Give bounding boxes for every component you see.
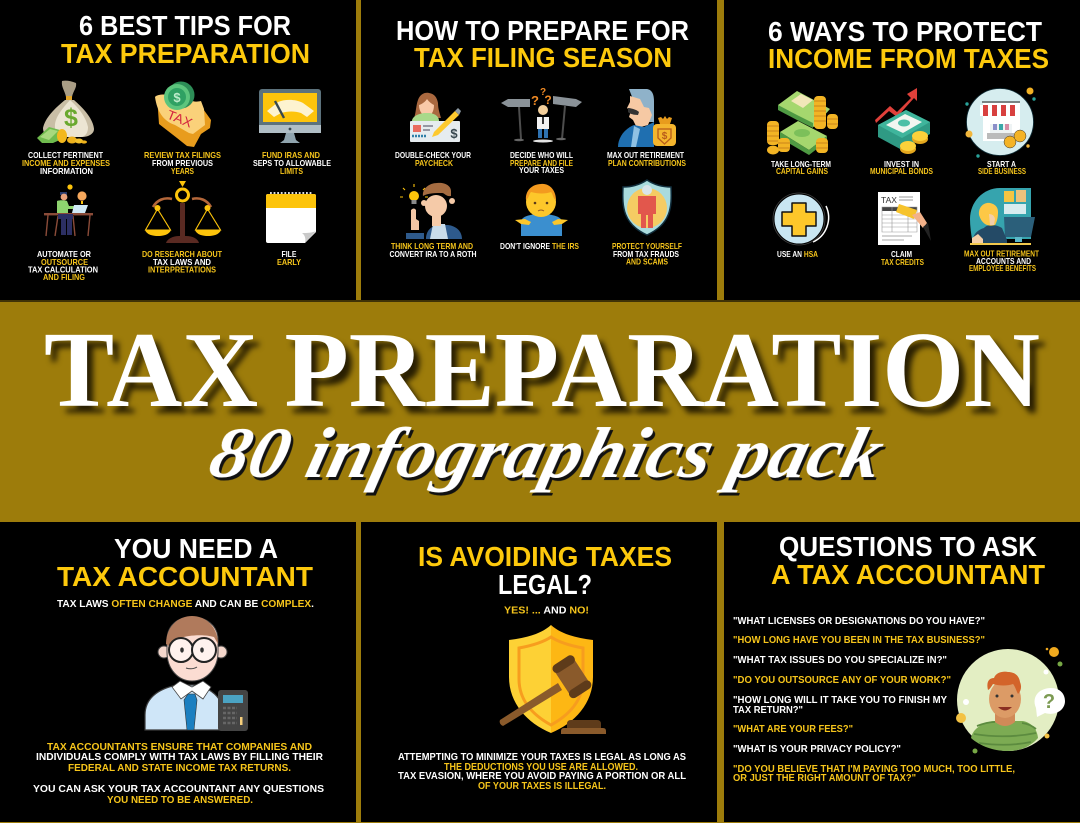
- icon: retirement man with bag: [618, 89, 676, 147]
- heading: [418, 541, 672, 600]
- heading: [61, 10, 310, 69]
- label: claim tax credits: CLAIM: [891, 249, 912, 259]
- body text: YOU NEED TO BE ANSWERED.: [107, 794, 253, 806]
- label: collect information: COLLECT PERTINENT: [28, 150, 104, 160]
- label: claim tax credits: [881, 249, 924, 267]
- label: collect information: INFORMATION: [40, 166, 93, 176]
- icon: boy with question bubble: [956, 647, 1065, 754]
- label: think long term: CONVERT IRA TO A ROTH: [390, 249, 476, 259]
- question list: TAX RETURN?": [733, 704, 803, 716]
- label: think long term: THINK LONG TERM AND: [391, 241, 473, 251]
- icon: protection shield: [623, 180, 671, 235]
- heading: TAX ACCOUNTANT: [57, 561, 313, 592]
- icon: piggy bank: TAX: [165, 107, 195, 131]
- label: protect yourself: PROTECT YOURSELF: [612, 241, 682, 251]
- panel: how to prepare for tax filing season: [361, 0, 717, 300]
- icon: signposts and questions: ?: [531, 93, 539, 108]
- body text: OF YOUR TAXES IS ILLEGAL.: [478, 780, 606, 792]
- question list: "HOW LONG WILL IT TAKE YOU TO FINISH MY: [733, 694, 947, 706]
- label: municipal bonds: MUNICIPAL BONDS: [870, 166, 933, 176]
- main title: TAX PREPARATION: [44, 311, 1040, 430]
- answer line: YES! ... AND NO!: [504, 604, 589, 616]
- intro line: TAX LAWS OFTEN CHANGE AND CAN BE COMPLEX.: [57, 598, 314, 610]
- label: municipal bonds: INVEST IN: [884, 159, 919, 169]
- heading: [57, 533, 313, 592]
- icon: money bag: [37, 81, 94, 144]
- label: review filings: REVIEW TAX FILINGS: [144, 150, 221, 160]
- label: fund iras: FUND IRAS AND: [262, 150, 320, 160]
- question list: "WHAT LICENSES OR DESIGNATIONS DO YOU HAVE?": [733, 615, 985, 627]
- label: side business: START A: [987, 159, 1016, 169]
- label: max out retirement accounts: EMPLOYEE BENEFITS: [969, 263, 1036, 273]
- question list: "WHAT TAX ISSUES DO YOU SPECIALIZE IN?": [733, 654, 947, 666]
- label: do research: INTERPRETATIONS: [148, 264, 216, 274]
- icon: signposts and questions: [501, 87, 582, 142]
- icon: signposts and questions: ?: [540, 87, 546, 98]
- label: max out retirement plan: MAX OUT RETIREMENT: [607, 150, 685, 160]
- question list: [733, 615, 1015, 784]
- panel: is avoiding taxes legal: [361, 522, 717, 822]
- icon: shop in circle: [965, 88, 1036, 158]
- label: decide who will prepare: PREPARE AND FILE: [510, 158, 573, 168]
- label: file early: [277, 249, 301, 267]
- label: review filings: YEARS: [171, 166, 194, 176]
- icon: accountant with calculator: [145, 616, 248, 731]
- icon: woman at monitor: [970, 188, 1035, 245]
- label: collect information: INCOME AND EXPENSES: [22, 158, 110, 168]
- label: don't ignore the irs: DON'T IGNORE THE IRS: [500, 241, 579, 251]
- icon: person at desk: [44, 184, 93, 236]
- label: collect information: [22, 150, 110, 176]
- label: double-check paycheck: [395, 150, 471, 168]
- label: automate or outsource: TAX CALCULATION: [28, 264, 98, 274]
- icon: shield and gavel: [500, 625, 606, 734]
- heading: YOU NEED A: [114, 533, 278, 564]
- label: automate or outsource: OUTSOURCE: [41, 257, 88, 267]
- heading: [771, 531, 1045, 590]
- question list: "WHAT IS YOUR PRIVACY POLICY?": [733, 743, 901, 755]
- body text: ATTEMPTING TO MINIMIZE YOUR TAXES IS LEGAL AS LONG AS: [398, 751, 686, 763]
- heading: A TAX ACCOUNTANT: [771, 559, 1045, 590]
- heading: TAX PREPARATION: [61, 38, 310, 69]
- icon: piggy bank: $: [173, 90, 181, 105]
- label: review filings: [144, 150, 221, 176]
- icon: monitor gauge: [259, 89, 321, 143]
- label: long-term capital gains: TAKE LONG-TERM: [771, 159, 831, 169]
- body text: [33, 741, 324, 806]
- heading: INCOME FROM TAXES: [768, 43, 1049, 74]
- label: fund iras: SEPS TO ALLOWABLE: [253, 158, 331, 168]
- heading: HOW TO PREPARE FOR: [396, 15, 689, 46]
- heading: LEGAL?: [498, 569, 592, 600]
- body text: YOU CAN ASK YOUR TAX ACCOUNTANT ANY QUESTIONS: [33, 783, 324, 795]
- label: decide who will prepare: [510, 150, 573, 175]
- label: fund iras: LIMITS: [280, 166, 303, 176]
- icon: bonds with red arrow: [875, 88, 930, 154]
- question list: "WHAT ARE YOUR FEES?": [733, 723, 853, 735]
- label: max out retirement plan: PLAN CONTRIBUTIONS: [608, 158, 686, 168]
- question list: OR JUST THE RIGHT AMOUNT OF TAX?": [733, 772, 916, 784]
- heading: [768, 16, 1049, 74]
- label: use an hsa: USE AN HSA: [777, 249, 818, 259]
- body text: TAX ACCOUNTANTS ENSURE THAT COMPANIES AND: [47, 741, 312, 753]
- panel: 6 ways to protect income from taxes: [724, 0, 1080, 300]
- heading: 6 BEST TIPS FOR: [79, 10, 291, 41]
- icon: thinking man with bulb: [400, 183, 462, 239]
- label: do research: DO RESEARCH ABOUT: [142, 249, 223, 259]
- body text: [398, 751, 687, 792]
- label: protect yourself: [612, 241, 682, 266]
- heading: QUESTIONS TO ASK: [779, 531, 1037, 562]
- heading: TAX FILING SEASON: [414, 42, 672, 73]
- body text: TAX EVASION, WHERE YOU AVOID PAYING A PORTION OR ALL: [398, 770, 687, 782]
- label: do research: [142, 249, 223, 274]
- icon: tax document and card: [878, 192, 931, 245]
- label: max out retirement accounts: MAX OUT RETIREMENT: [964, 248, 1040, 258]
- label: double-check paycheck: PAYCHECK: [415, 158, 454, 168]
- banner: title band: [0, 300, 1080, 493]
- icon: hsa cross: [773, 193, 829, 245]
- label: claim tax credits: TAX CREDITS: [881, 257, 924, 267]
- label: automate or outsource: AND FILING: [43, 272, 85, 282]
- label: think long term: [390, 241, 476, 259]
- label: file early: FILE: [282, 249, 297, 259]
- icon: woman checking paycheck: [410, 93, 461, 142]
- body text: THE DEDUCTIONS YOU USE ARE ALLOWED.: [444, 761, 638, 773]
- icon: tax document and card: TAX: [881, 195, 897, 205]
- icon: woman checking paycheck: $: [450, 126, 458, 141]
- label: decide who will prepare: DECIDE WHO WILL: [510, 150, 573, 160]
- label: protect yourself: AND SCAMS: [626, 256, 668, 266]
- label: file early: EARLY: [277, 257, 301, 267]
- question list: "HOW LONG HAVE YOU BEEN IN THE TAX BUSINESS?": [733, 634, 985, 646]
- label: protect yourself: FROM TAX FRAUDS: [613, 249, 679, 259]
- label: automate or outsource: [28, 249, 98, 282]
- body text: INDIVIDUALS COMPLY WITH TAX LAWS BY FILLING THEIR: [36, 751, 323, 763]
- icon: retirement man with bag: $: [662, 131, 668, 142]
- label: max out retirement accounts: [964, 248, 1040, 273]
- label: max out retirement plan: [607, 150, 686, 168]
- panel: 6 best tips for tax preparation: [0, 0, 356, 300]
- icon: shrugging man: [515, 184, 568, 236]
- label: long-term capital gains: CAPITAL GAINS: [776, 166, 828, 176]
- heading: [396, 15, 689, 73]
- label: max out retirement accounts: ACCOUNTS AND: [976, 256, 1031, 266]
- icon: piggy bank: [155, 82, 211, 147]
- icon: boy with question bubble: ?: [1043, 691, 1055, 713]
- icon: cash and coin stacks: [767, 91, 838, 155]
- label: do research: TAX LAWS AND: [153, 257, 211, 267]
- icon: money bag: $: [64, 104, 78, 132]
- heading: IS AVOIDING TAXES: [418, 541, 672, 572]
- label: review filings: FROM PREVIOUS: [152, 158, 213, 168]
- question list: "DO YOU OUTSOURCE ANY OF YOUR WORK?": [733, 674, 951, 686]
- label: decide who will prepare: YOUR TAXES: [519, 165, 564, 175]
- heading: 6 WAYS TO PROTECT: [768, 16, 1042, 47]
- icon: signposts and questions: ?: [544, 93, 552, 107]
- label: side business: SIDE BUSINESS: [978, 166, 1026, 176]
- label: municipal bonds: [870, 159, 933, 176]
- subtitle: 80 infographics pack: [202, 413, 892, 493]
- label: automate or outsource: AUTOMATE OR: [37, 249, 91, 259]
- icon: scales of justice: [145, 181, 221, 243]
- icon: calendar note: [266, 193, 316, 243]
- panel: you need a tax accountant: [0, 522, 356, 822]
- label: fund iras: [253, 150, 331, 176]
- label: double-check paycheck: DOUBLE-CHECK YOUR: [395, 150, 471, 160]
- question list: "DO YOU BELIEVE THAT I'M PAYING TOO MUCH, TOO LITTLE,: [733, 763, 1015, 775]
- body text: FEDERAL AND STATE INCOME TAX RETURNS.: [68, 762, 291, 774]
- label: side business: [978, 159, 1026, 176]
- panel: questions to ask a tax accountant: [724, 522, 1080, 822]
- label: long-term capital gains: [771, 159, 831, 176]
